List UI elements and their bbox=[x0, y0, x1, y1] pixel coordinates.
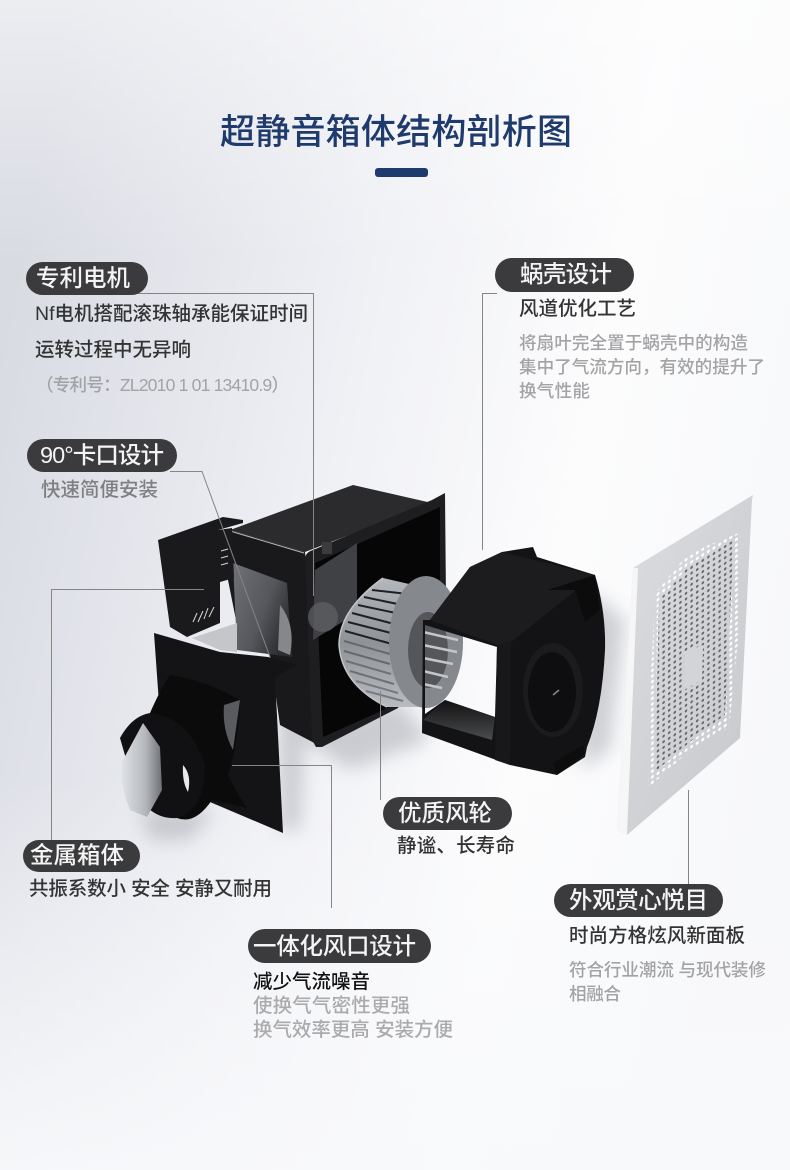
soft product shadows bbox=[140, 590, 625, 840]
callout: 专利电机 bbox=[26, 262, 308, 395]
callout: 外观赏心悦目 bbox=[554, 884, 766, 1004]
callout: 90°卡口设计 bbox=[27, 439, 177, 501]
blower wheel bbox=[339, 576, 463, 708]
callout: 一体化风口设计: 使换气气密性更强 bbox=[253, 995, 410, 1017]
exploded product: metal box bbox=[218, 485, 446, 747]
callout: 一体化风口设计 bbox=[248, 929, 453, 1041]
callout: 外观赏心悦目: 相融合 bbox=[569, 984, 621, 1004]
callout: 外观赏心悦目: 时尚方格炫风新面板 bbox=[569, 924, 745, 947]
callout: 外观赏心悦目: 外观赏心悦目 bbox=[569, 887, 708, 913]
callout: 一体化风口设计: 减少气流噪音 bbox=[253, 971, 370, 993]
callout: 金属箱体 bbox=[23, 840, 272, 900]
callout: 蜗壳设计: 蜗壳设计 bbox=[520, 261, 612, 287]
callout: 专利电机: （专利号：ZL2010 1 01 13410.9） bbox=[36, 375, 289, 395]
callout: 优质风轮: 静谧、长寿命 bbox=[397, 834, 515, 857]
callout: 蜗壳设计: 换气性能 bbox=[519, 381, 590, 401]
callout: 90°卡口设计: 90°卡口设计 bbox=[40, 442, 164, 468]
scroll housing bbox=[422, 547, 605, 775]
callout: 一体化风口设计: 一体化风口设计 bbox=[253, 933, 416, 959]
callout: 专利电机: 专利电机 bbox=[36, 265, 130, 291]
callout: 蜗壳设计: 将扇叶完全置于蜗壳中的构造 bbox=[519, 333, 748, 353]
callout: 优质风轮: 优质风轮 bbox=[398, 800, 492, 826]
callout: 金属箱体: 金属箱体 bbox=[30, 842, 124, 868]
callout: 蜗壳设计: 风道优化工艺 bbox=[519, 298, 636, 320]
motor controller box bbox=[158, 517, 243, 652]
title: 超静音箱体结构剖析图 bbox=[220, 113, 572, 152]
callout: 外观赏心悦目: 符合行业潮流 与现代装修 bbox=[569, 960, 766, 980]
decorative panel bbox=[617, 495, 753, 835]
icon: damper flap bbox=[122, 723, 162, 817]
callout: 专利电机: Nf电机搭配滚珠轴承能保证时间 bbox=[35, 303, 308, 325]
callout: 一体化风口设计: 换气效率更高 安装方便 bbox=[253, 1018, 453, 1041]
title accent bar bbox=[375, 168, 428, 177]
callout: 90°卡口设计: 快速简便安装 bbox=[41, 479, 158, 501]
integrated duct plate with outlet bbox=[120, 633, 297, 833]
callout: 专利电机: 运转过程中无异响 bbox=[35, 339, 191, 361]
callout: 金属箱体: 共振系数小 安全 安静又耐用 bbox=[29, 878, 272, 900]
callout: 蜗壳设计: 集中了气流方向，有效的提升了 bbox=[519, 357, 765, 377]
callout: 优质风轮 bbox=[383, 797, 515, 857]
leader lines bbox=[40, 294, 688, 908]
callout: 蜗壳设计 bbox=[495, 258, 765, 401]
